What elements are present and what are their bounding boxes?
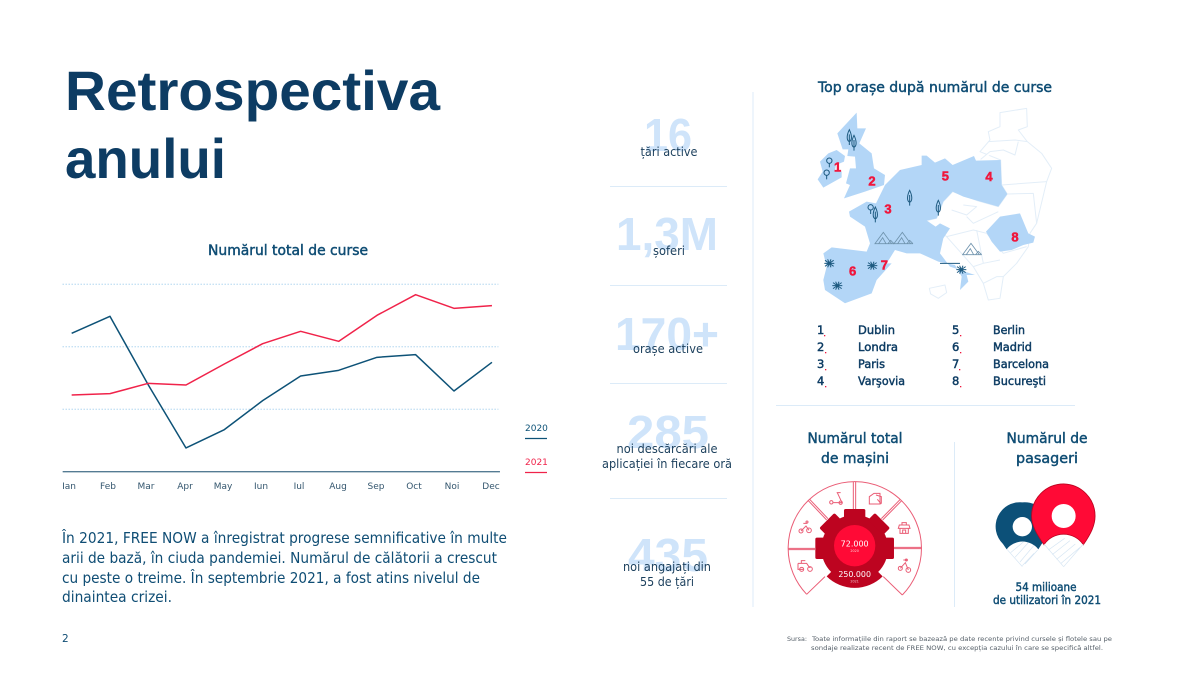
axis labels: Noi (445, 482, 459, 492)
stat: employees: noi angajați din (623, 559, 711, 574)
stat: downloads: aplicației în fiecare oră (602, 456, 732, 471)
stat: downloads (602, 406, 732, 471)
chart heading: Numărul total de curse (208, 243, 368, 259)
stat: cities: orașe active (633, 341, 703, 356)
icon: scooter (833, 493, 842, 503)
source note: Toate informațiile din raport se bazează pe date recente privind cursele și flotele sau pe (811, 635, 1112, 644)
top cities list: 8 (952, 374, 959, 388)
top cities list: Dublin (858, 323, 895, 337)
city rank markers: 3 (884, 201, 892, 216)
top cities list: Londra (858, 340, 898, 354)
title: anului (65, 127, 226, 190)
gear values: 250.000 (838, 570, 871, 579)
summary paragraph: cu peste o treime. În septembrie 2021, a fost atins nivelul de (62, 568, 480, 587)
top cities list: Barcelona (993, 357, 1049, 371)
gear values: 2020 (850, 549, 859, 553)
page number: 2 (62, 633, 69, 645)
city rank markers: 1 (834, 160, 841, 175)
top cities list: Bucureşti (993, 374, 1046, 388)
vehicles gear chart (788, 482, 921, 595)
axis labels: May (214, 482, 233, 492)
title: Retrospectiva (65, 59, 441, 122)
axis labels: Sep (368, 482, 385, 492)
stat: employees: 55 de țări (640, 574, 694, 589)
city rank markers: 7 (881, 257, 888, 272)
icon: car (869, 493, 881, 504)
top cities list: 2 (817, 340, 824, 354)
axis labels: Ian (62, 482, 76, 492)
unhighlighted countries (927, 108, 1052, 300)
icon: bike left (799, 529, 803, 533)
axis labels (62, 482, 500, 492)
passengers heading: Numărul de (1006, 431, 1088, 447)
map decorations (824, 130, 982, 290)
cars heading (808, 431, 902, 467)
chart legend: 2020 (525, 424, 548, 434)
axis labels: Mar (138, 482, 155, 492)
axis labels: Feb (100, 482, 116, 492)
map heading: Top orașe după numărul de curse (817, 80, 1052, 96)
passengers caption (993, 580, 1101, 607)
city rank markers: 5 (942, 169, 949, 184)
top cities list: 4 (817, 374, 824, 388)
city rank markers: 6 (849, 263, 856, 278)
highlighted countries (818, 113, 1035, 303)
city rank markers (834, 160, 1019, 278)
chart legend (525, 424, 548, 472)
top cities list: 3 (817, 357, 824, 371)
source note: Sursa: (787, 635, 807, 643)
summary paragraph (61, 528, 507, 606)
stat: cities: 170+ (615, 308, 719, 360)
stat: countries: 16 (644, 109, 692, 161)
city rank markers: 2 (868, 173, 876, 188)
passengers caption: de utilizatori în 2021 (993, 593, 1101, 607)
summary paragraph: dinaintea crizei. (62, 588, 172, 606)
axis labels: Aug (329, 482, 347, 492)
top cities list: 7 (952, 357, 959, 371)
city rank markers: 8 (1011, 229, 1019, 244)
axis labels: Oct (406, 482, 422, 492)
series 2020 (72, 316, 492, 448)
chart legend: 2021 (525, 458, 548, 468)
stat: countries: țări active (640, 144, 698, 159)
summary paragraph: În 2021, FREE NOW a înregistrat progrese semnificative în multe (61, 528, 507, 547)
top cities list: 5 (952, 323, 959, 337)
cars heading: de mașini (821, 451, 889, 467)
gear (815, 509, 894, 588)
summary paragraph: arii de bază, în ciuda pandemiei. Numărul de călătorii a crescut (62, 549, 497, 567)
fan outline (788, 482, 921, 595)
source note: sondaje realizate recent de FREE NOW, cu excepția cazului în care se specifică altfel. (811, 644, 1103, 653)
passengers heading: pasageri (1016, 451, 1078, 467)
icon: bike right (898, 566, 902, 570)
red pin (1032, 484, 1095, 544)
top cities list: Paris (858, 357, 885, 371)
axis labels: Apr (177, 482, 193, 492)
top cities list: Berlin (993, 323, 1025, 337)
gear values: 72.000 (841, 540, 869, 549)
gear values (838, 540, 871, 583)
stat: downloads: noi descărcări ale (616, 441, 718, 456)
cars heading: Numărul total (808, 431, 902, 447)
top cities list: Varşovia (858, 374, 905, 388)
stat: drivers: 1,3M (616, 208, 718, 260)
top cities list (817, 323, 1049, 388)
passengers pins icon (996, 484, 1095, 567)
icon: shop (898, 523, 910, 533)
axis labels: Dec (482, 482, 500, 492)
top cities list: Madrid (993, 340, 1032, 354)
map of Europe (818, 108, 1052, 303)
blue pin (996, 502, 1049, 549)
top cities list: 1 (817, 323, 824, 337)
series 2021 (72, 295, 492, 395)
stat: drivers: șoferi (653, 243, 685, 258)
passengers heading (1006, 431, 1088, 467)
icon: moped (798, 561, 811, 569)
passengers caption: 54 milioane (1016, 580, 1076, 594)
line chart: total rides (62, 284, 500, 492)
gear values: 2021 (850, 579, 859, 583)
city rank markers: 4 (985, 169, 993, 184)
stats column (602, 109, 732, 589)
axis labels: Iul (294, 482, 304, 492)
source note (787, 635, 1112, 653)
stat: employees: 435 (628, 529, 708, 581)
top cities list: 6 (952, 340, 959, 354)
axis labels: Iun (254, 482, 268, 492)
stat: downloads: 285 (627, 406, 709, 458)
title (65, 59, 441, 190)
